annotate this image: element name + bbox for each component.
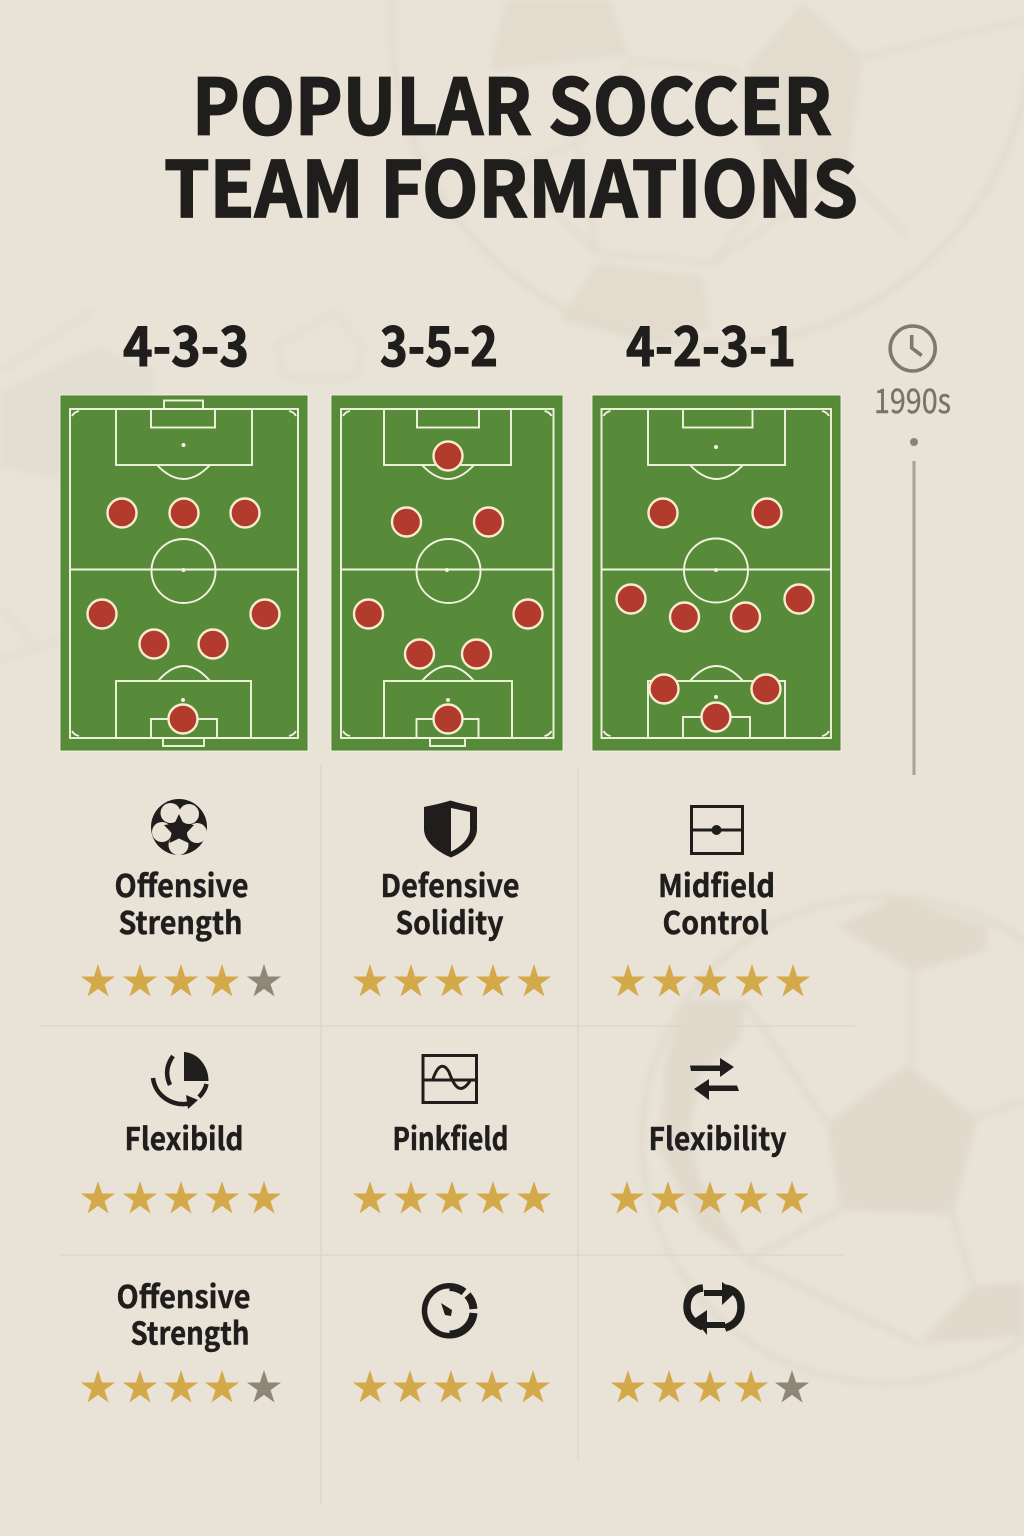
pitch: 3-5-2 (330, 394, 564, 752)
icon: clock (890, 326, 935, 371)
icon: rotating pie (153, 1052, 209, 1109)
heading: 3-5-2: 3-5-2 (380, 302, 498, 382)
label: Defensive (380, 861, 520, 906)
panel: midfield control 4-2-3-1 (611, 806, 810, 997)
stars: 5 of 5 (353, 1181, 551, 1214)
heading: 4-3-3: 4-3-3 (123, 302, 249, 382)
title: POPULAR SOCCER (192, 46, 832, 158)
panel: defensive solidity 3-5-2 (353, 800, 551, 997)
icon: gauge (424, 1286, 474, 1336)
watermark: left soccer ball fragments (0, 310, 363, 660)
label: Flexibild (124, 1114, 244, 1159)
panel: gauge 3-5-2 (353, 1286, 550, 1403)
label: Flexibility (648, 1114, 787, 1159)
panel: offensive strength lower 4-3-3 (81, 1272, 281, 1403)
stars: 4 of 5 (81, 964, 281, 997)
pitch: 4-3-3 (60, 394, 308, 752)
panel: midfield control 4-2-3-1: Control (662, 898, 769, 943)
label: Offensive (116, 1272, 250, 1317)
stars: 5 of 5 (611, 964, 810, 997)
watermark: bottom soccer ball (642, 897, 1024, 1383)
stars: 5 of 5 (81, 1181, 281, 1214)
panel: defensive solidity 3-5-2: Solidity (396, 898, 504, 943)
icon: soccer ball (151, 799, 207, 855)
icon: midfield box (692, 806, 742, 854)
panel: flexibility 4-2-3-1 (610, 1058, 809, 1214)
icon: swap arrows (690, 1058, 739, 1100)
label: Pinkfield (392, 1114, 508, 1159)
panel: offensive strength lower 4-3-3: Strength (130, 1308, 250, 1354)
label: Offensive (114, 861, 248, 906)
timeline line (912, 461, 916, 775)
panel: offensive strength 4-3-3 (81, 799, 281, 997)
panel: cycle 4-2-3-1 (611, 1282, 809, 1403)
stars: 4 of 5 (611, 1370, 809, 1403)
icon: shield (424, 800, 477, 858)
timeline dot (910, 438, 918, 446)
title (164, 46, 858, 240)
panel: flexibild 4-3-3 (81, 1052, 281, 1214)
icon: wave chart (423, 1056, 476, 1102)
panel: offensive strength 4-3-3: Strength (118, 898, 242, 943)
stars: 4 of 5 (81, 1370, 281, 1403)
label: Midfield (658, 861, 775, 906)
title: TEAM FORMATIONS (164, 129, 858, 240)
icon: cycle arrows (687, 1282, 741, 1335)
stars: 5 of 5 (353, 964, 551, 997)
pitch: 4-2-3-1 (592, 394, 842, 752)
rating grid lines (40, 765, 855, 1505)
panel: pinkfield 3-5-2 (353, 1056, 551, 1214)
timeline (874, 326, 951, 775)
watermark: top soccer ball (392, 0, 1024, 345)
stars: 5 of 5 (353, 1370, 550, 1403)
era label: 1990s (874, 374, 951, 423)
stars: 5 of 5 (610, 1181, 809, 1214)
heading: 4-2-3-1: 4-2-3-1 (626, 302, 796, 382)
